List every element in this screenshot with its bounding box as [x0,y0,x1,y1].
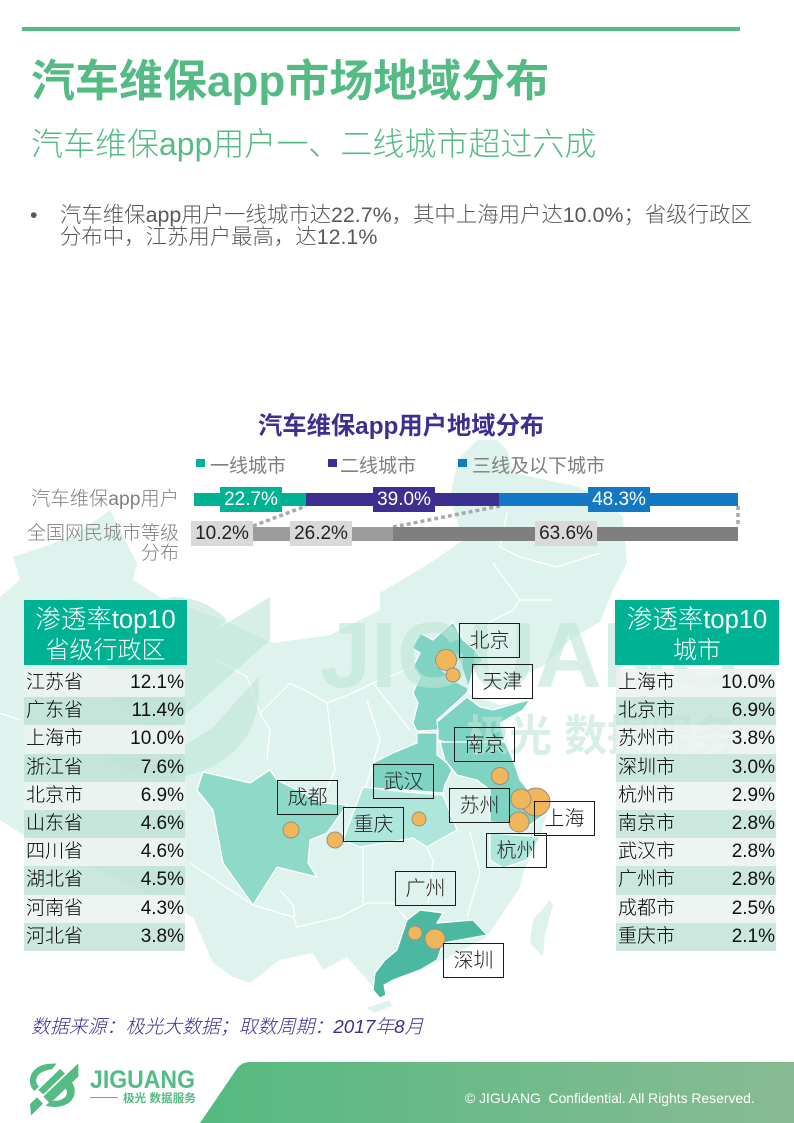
table: provinces: 四川省 [26,841,83,862]
connector lines [253,506,740,527]
row label: app users: 汽车维保app用户 [31,489,179,510]
table header: provinces: 渗透率top10 [35,606,176,634]
table: cities: 3.0% [732,757,775,778]
city labels: 广州 [406,878,446,900]
table: cities: 北京市 [618,700,675,721]
city labels: 南京 [464,734,504,756]
table: provinces: 山东省 [26,813,83,834]
table header: provinces [24,600,187,665]
chart title: 汽车维保app用户地域分布 [258,413,544,440]
table: provinces: 7.6% [141,757,184,778]
table: cities: 苏州市 [618,728,675,749]
table: cities: 杭州市 [618,785,675,806]
bullet text: • [30,203,38,227]
bar: national [191,521,738,546]
table: cities: 2.8% [732,869,775,890]
table: cities: 10.0% [721,672,775,693]
bar: national: 63.6% [539,523,593,544]
table: provinces: 广东省 [26,700,83,721]
table: cities: 南京市 [618,813,675,834]
table: cities: 成都市 [618,898,675,918]
footer copyright: © JIGUANG Confidential. All Rights Reserved. [465,1090,755,1106]
bullet text [30,203,752,249]
table: provinces: 4.6% [141,813,184,834]
province borders [0,513,600,927]
bar: app users [194,487,738,512]
table: provinces: 上海市 [26,728,83,749]
city labels: 上海 [544,808,584,830]
bar: national: 26.2% [294,523,348,544]
data source: 数据来源：极光大数据；取数周期：2017年8月 [31,1017,424,1038]
table: provinces: 11.4% [132,700,184,721]
table: provinces: 河北省 [26,926,83,947]
table: provinces: 湖北省 [26,869,83,890]
table header: provinces: 省级行政区 [46,637,166,664]
table: cities: 2.1% [732,926,775,947]
city labels: 北京 [470,630,510,652]
row label: national: 分布 [141,543,179,564]
highlighted provinces [197,622,547,998]
city labels: 武汉 [384,771,424,793]
city labels: 天津 [482,671,522,693]
footer logo wordmark: 极光 数据服务 [123,1091,196,1105]
table: cities: 2.8% [732,813,775,834]
table: provinces: 4.6% [141,841,184,862]
table: provinces: 浙江省 [26,757,83,778]
footer band [200,1062,794,1123]
watermark [100,597,740,778]
table: cities: 2.9% [732,785,775,806]
city labels: 深圳 [454,950,494,972]
table: cities [616,669,776,951]
base map [0,440,627,1013]
table header: cities [615,600,779,665]
watermark wordmark: JIGUANG [320,603,740,707]
table: cities: 6.9% [732,700,775,721]
table: provinces: 河南省 [26,898,83,918]
top rule [22,27,740,31]
legend: 一线城市 [210,456,286,477]
bullet text: 分布中，江苏用户最高，达12.1% [60,225,377,249]
table: provinces: 10.0% [130,728,184,749]
table: provinces [24,669,185,951]
table: cities: 上海市 [618,672,675,693]
subtitle: 汽车维保app用户一、二线城市超过六成 [31,126,596,162]
table: provinces: 北京市 [26,785,83,806]
table: cities: 重庆市 [618,926,675,947]
table: cities: 武汉市 [618,841,675,862]
bar: national: 10.2% [195,523,249,544]
table: cities: 广州市 [618,869,675,890]
title: 汽车维保app市场地域分布 [31,57,549,106]
table: cities: 3.8% [732,728,775,749]
city bubbles [283,650,550,949]
legend: 二线城市 [340,456,416,477]
bar: app users: 39.0% [377,489,431,510]
watermark logo [100,597,270,778]
table: cities: 深圳市 [618,757,675,778]
table: cities: 2.5% [732,898,775,918]
city labels: 成都 [288,787,328,809]
legend [196,456,605,477]
table: provinces: 12.1% [130,672,184,693]
table: provinces: 6.9% [141,785,184,806]
legend: 三线及以下城市 [472,456,605,477]
table: provinces: 4.5% [141,869,184,890]
row label: national [27,522,179,564]
table: provinces: 江苏省 [26,672,83,693]
city labels: 苏州 [460,795,500,817]
bar: app users: 48.3% [592,489,646,510]
row label: national: 全国网民城市等级 [27,523,179,544]
table header: cities: 渗透率top10 [627,606,767,634]
bullet text: 汽车维保app用户一线城市达22.7%，其中上海用户达10.0%；省级行政区 [60,203,752,227]
footer logo icon [30,1063,78,1116]
table: provinces: 3.8% [141,926,184,947]
taiwan [530,900,553,957]
hainan [366,1000,392,1013]
table: provinces: 4.3% [141,898,184,918]
watermark tagline: 极光 数据服务 [466,713,736,761]
bar: app users: 22.7% [224,489,278,510]
table header: cities: 城市 [673,637,721,664]
city labels: 杭州 [496,840,536,862]
table: cities: 2.8% [732,841,775,862]
city labels: 重庆 [354,814,394,836]
